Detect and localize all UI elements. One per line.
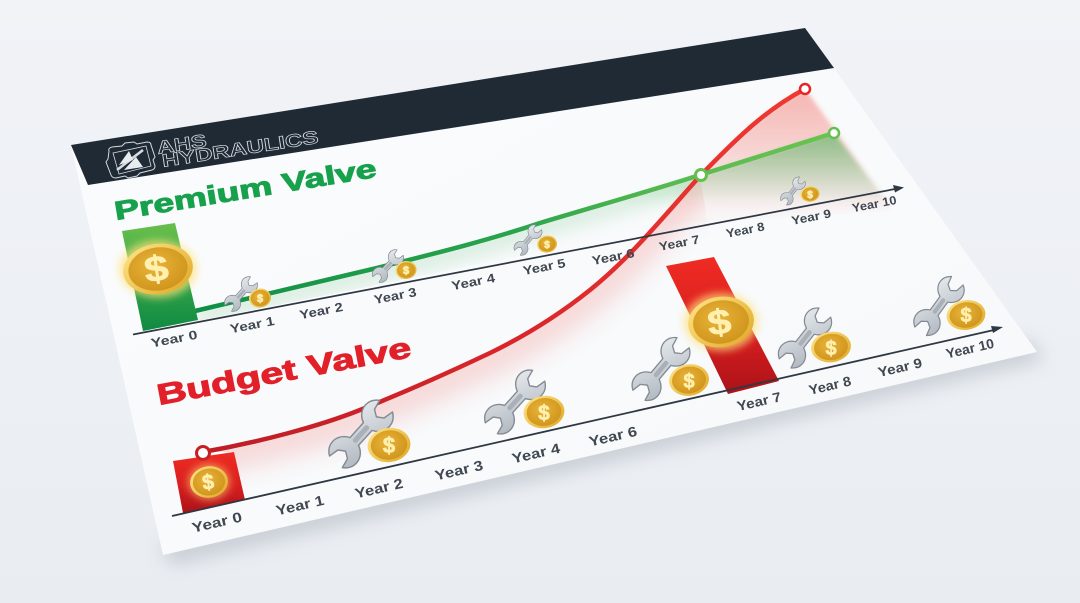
- axis labels: premium: Year 1: [229, 314, 276, 336]
- axis labels: premium: [150, 193, 898, 350]
- header band: [71, 28, 834, 185]
- logo wordmark: HYDRAULICS: HYDRAULICS: [161, 127, 320, 171]
- icon: big coin premium Year 0: [119, 239, 197, 299]
- axis labels: budget: Year 1: [274, 492, 326, 518]
- icon: coin budget Year 0: $: [201, 470, 216, 495]
- axis: premium timeline: [133, 185, 904, 334]
- icon: wrench and coin, budget Year 2: [324, 395, 413, 473]
- icon: wrench and coin, premium Year 5: $: [544, 240, 550, 251]
- chart: budget valve timeline: [172, 257, 1003, 536]
- heading: Premium Valve: Premium Valve: [112, 153, 378, 226]
- icon: wrench and coin, budget Year 8: $: [825, 338, 837, 360]
- icon: hydraulic cylinder badge: [106, 142, 155, 178]
- axis labels: premium: Year 10: [851, 193, 898, 215]
- marker: budget start: [196, 446, 210, 460]
- axis labels: budget: Year 0: [190, 509, 244, 536]
- bar: budget Year 0 cost: [173, 452, 245, 513]
- icon: wrench and coin, premium Year 9: [779, 175, 820, 207]
- axis labels: budget: Year 10: [944, 336, 996, 361]
- icon: coin budget Year 0: [188, 464, 230, 500]
- chart: premium valve timeline: [122, 185, 904, 350]
- marker: crossover point: [696, 170, 706, 180]
- logo wordmark: AHS: AHS: [156, 131, 208, 158]
- area: green cost glow, lower: [195, 180, 700, 316]
- axis labels: premium: Year 8: [725, 219, 766, 241]
- area: red cost fade, right: [657, 89, 892, 226]
- icon: big coin premium Year 0: $: [142, 248, 171, 291]
- axis labels: budget: [190, 336, 996, 536]
- axis labels: budget: Year 8: [807, 373, 853, 398]
- axis labels: budget: Year 3: [433, 457, 485, 483]
- icon: wrench and coin, budget Year 10: [910, 273, 987, 339]
- icon: wrench and coin, budget Year 4: $: [538, 402, 550, 425]
- icon: wrench and coin, premium Year 1: [222, 274, 272, 314]
- area: green cost fade, right: [600, 133, 884, 250]
- line: budget cumulative cost: [203, 89, 805, 452]
- bar: budget Year 7 cost: [666, 257, 779, 394]
- icon: wrench and coin, budget Year 6: [628, 333, 711, 405]
- axis labels: premium: Year 7: [658, 232, 701, 254]
- icon: wrench and coin, premium Year 9: $: [807, 190, 813, 201]
- panel: paper sheet: [71, 28, 1037, 555]
- axis labels: premium: Year 0: [150, 328, 199, 350]
- icon: wrench and coin, premium Year 3: $: [403, 265, 409, 277]
- marker: budget end: [800, 84, 810, 94]
- axis labels: budget: Year 6: [587, 423, 639, 449]
- icon: wrench and coin, premium Year 1: $: [257, 293, 263, 305]
- bar: premium Year 0 cost: [122, 223, 198, 331]
- icon: wrench and coin, budget Year 8: [774, 304, 853, 372]
- axis labels: budget: Year 4: [510, 440, 562, 466]
- axis labels: premium: Year 5: [522, 256, 567, 278]
- icon: wrench and coin, budget Year 6: $: [683, 371, 695, 393]
- paper shadow: [160, 340, 1044, 565]
- icon: wrench and coin, budget Year 4: [480, 366, 567, 438]
- area: red cost glow, lower: [203, 182, 700, 458]
- icon: wrench and coin, premium Year 5: [512, 223, 558, 257]
- axis: budget timeline: [172, 326, 1003, 516]
- line: premium cumulative cost: [195, 133, 834, 311]
- marker: premium end: [829, 128, 839, 138]
- axis labels: budget: Year 7: [735, 389, 783, 414]
- icon: wrench and coin, premium Year 3: [370, 247, 418, 285]
- icon: big coin budget Year 7: [684, 292, 758, 352]
- heading: Budget Valve: Budget Valve: [154, 332, 414, 412]
- axis labels: premium: Year 2: [298, 300, 344, 322]
- axis labels: budget: Year 9: [876, 355, 924, 380]
- axis labels: premium: Year 4: [450, 271, 496, 293]
- axis labels: premium: Year 9: [790, 206, 833, 228]
- icon: wrench and coin, budget Year 2: $: [383, 433, 395, 458]
- icon: wrench and coin, budget Year 10: $: [960, 305, 972, 327]
- axis labels: premium: Year 6: [591, 246, 636, 268]
- axis labels: premium: Year 3: [373, 285, 418, 307]
- icon: big coin budget Year 7: $: [705, 302, 734, 344]
- logo: AHS Hydraulics: [106, 127, 320, 178]
- axis labels: budget: Year 2: [353, 475, 405, 501]
